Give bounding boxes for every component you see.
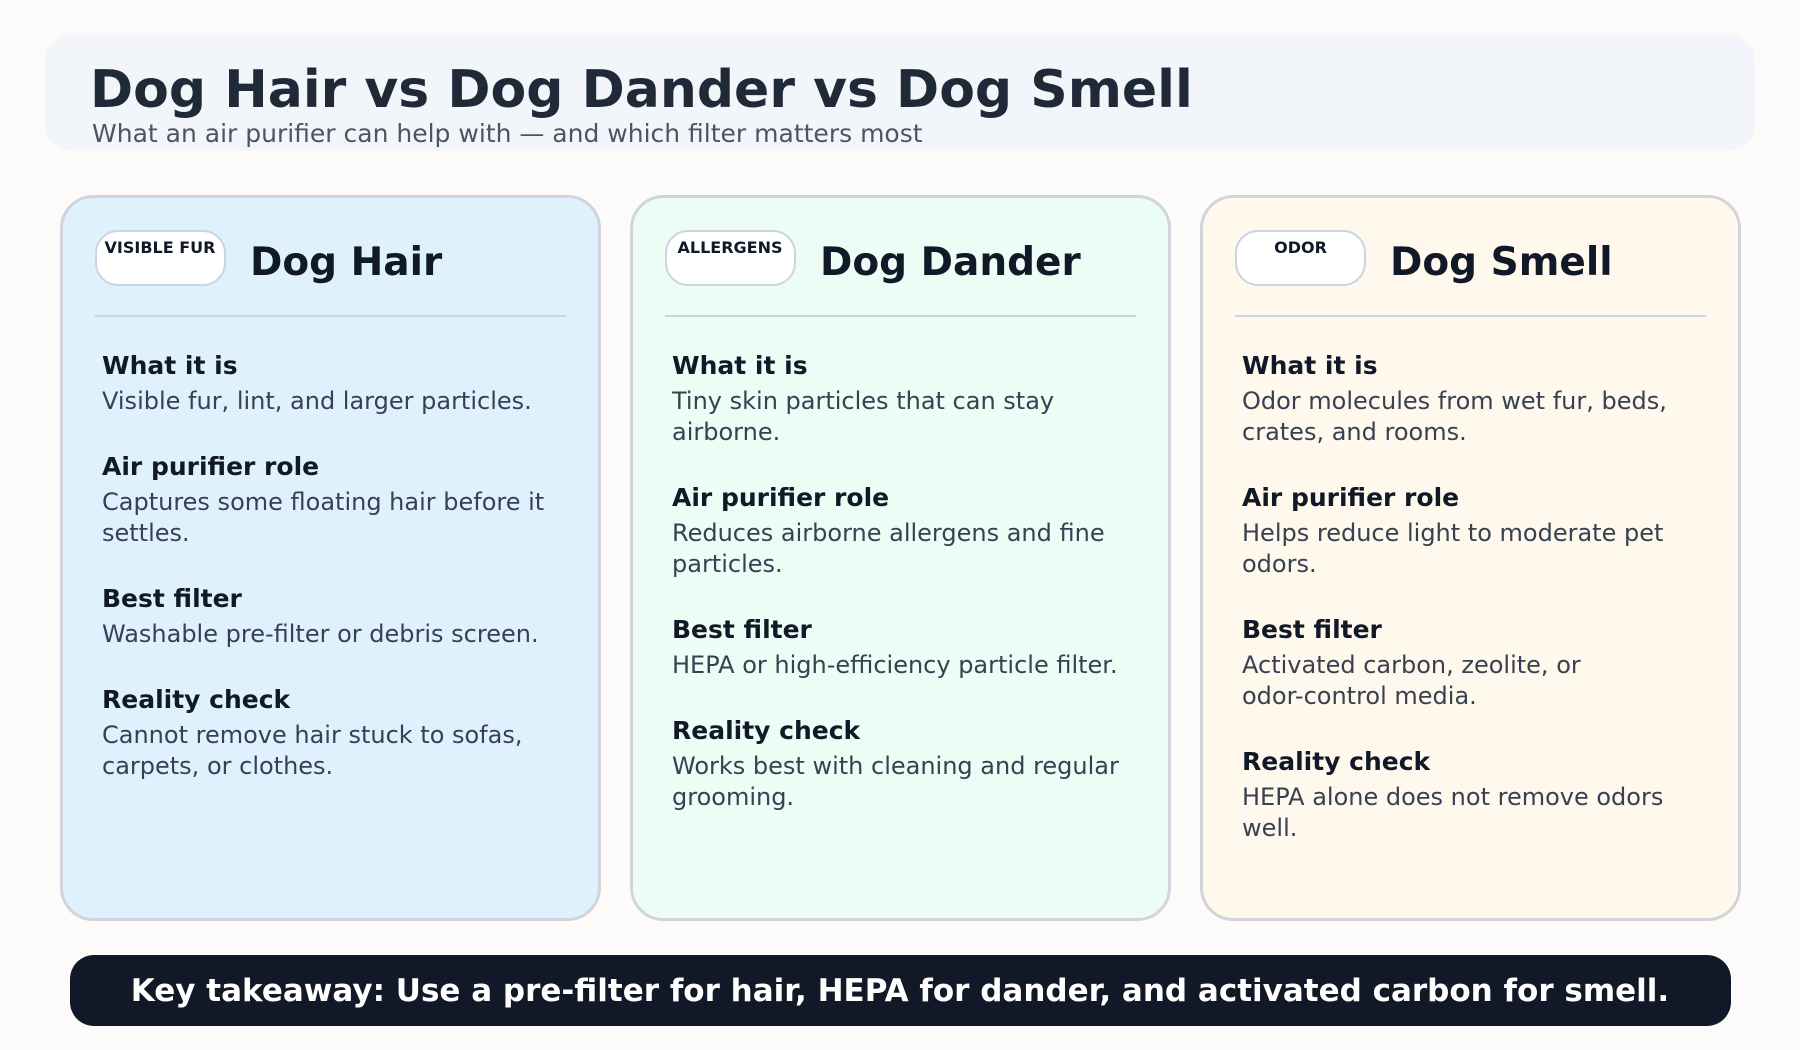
section: air purifier role: Air purifier role bbox=[672, 483, 889, 512]
section: reality check bbox=[672, 716, 1119, 811]
section: reality check: HEPA alone does not remove odors bbox=[1242, 783, 1663, 811]
section: what it is bbox=[671, 351, 1054, 446]
section: air purifier role bbox=[672, 483, 1105, 578]
header band bbox=[45, 35, 1755, 151]
heading: dog hair: Dog Hair bbox=[250, 240, 443, 285]
section: air purifier role: settles. bbox=[102, 519, 190, 547]
key takeaway banner bbox=[70, 955, 1731, 1026]
section: best filter: odor-control media. bbox=[1242, 682, 1477, 710]
section: air purifier role: Helps reduce light to moderate pet bbox=[1242, 519, 1663, 547]
section: reality check: well. bbox=[1242, 814, 1297, 842]
section: best filter: HEPA or high-efficiency particle filter. bbox=[672, 651, 1118, 679]
panel: dog dander bbox=[632, 196, 1170, 920]
section: what it is: What it is bbox=[672, 351, 808, 380]
badge: odor: ODOR bbox=[1274, 238, 1327, 257]
section: what it is: Tiny skin particles that can stay bbox=[671, 387, 1054, 415]
title: Dog Hair vs Dog Dander vs Dog Smell bbox=[90, 60, 1193, 120]
section: what it is bbox=[1242, 351, 1667, 446]
section: best filter: Best filter bbox=[102, 584, 243, 613]
section: best filter: Washable pre-filter or debris screen. bbox=[102, 620, 539, 648]
heading: dog dander: Dog Dander bbox=[820, 240, 1081, 285]
badge: visible fur bbox=[96, 231, 225, 285]
section: what it is: airborne. bbox=[672, 418, 780, 446]
section: best filter bbox=[1242, 615, 1581, 710]
panel: dog hair bbox=[62, 196, 600, 920]
section: what it is bbox=[102, 351, 532, 415]
panel: dog smell bbox=[1202, 196, 1740, 920]
section: reality check bbox=[102, 685, 523, 780]
section: air purifier role: Reduces airborne allergens and fine bbox=[672, 519, 1105, 547]
section: air purifier role: Air purifier role bbox=[1242, 483, 1459, 512]
section: reality check: grooming. bbox=[672, 783, 794, 811]
section: air purifier role: Air purifier role bbox=[102, 452, 319, 481]
section: reality check: Cannot remove hair stuck to sofas, bbox=[102, 721, 523, 749]
badge: visible fur: VISIBLE FUR bbox=[105, 238, 215, 257]
section: reality check: Reality check bbox=[672, 716, 862, 745]
section: best filter: Best filter bbox=[672, 615, 813, 644]
section: best filter: Best filter bbox=[1242, 615, 1383, 644]
badge: allergens: ALLERGENS bbox=[678, 238, 782, 257]
heading: dog smell: Dog Smell bbox=[1390, 240, 1613, 285]
section: air purifier role: odors. bbox=[1242, 550, 1317, 578]
section: air purifier role bbox=[102, 452, 544, 547]
section: best filter: Activated carbon, zeolite, or bbox=[1242, 651, 1581, 679]
badge: odor bbox=[1236, 231, 1365, 285]
section: reality check: Reality check bbox=[102, 685, 292, 714]
section: air purifier role: particles. bbox=[672, 550, 783, 578]
section: air purifier role bbox=[1242, 483, 1663, 578]
section: what it is: What it is bbox=[1242, 351, 1378, 380]
section: air purifier role: Captures some floating hair before it bbox=[102, 488, 544, 516]
section: best filter bbox=[102, 584, 539, 648]
section: reality check bbox=[1242, 747, 1663, 842]
section: what it is: crates, and rooms. bbox=[1242, 418, 1467, 446]
section: what it is: Visible fur, lint, and larger particles. bbox=[102, 387, 532, 415]
section: reality check: carpets, or clothes. bbox=[102, 752, 333, 780]
section: best filter bbox=[672, 615, 1118, 679]
badge: allergens bbox=[666, 231, 795, 285]
subtitle: What an air purifier can help with — and which filter matters most bbox=[92, 119, 923, 148]
section: reality check: Reality check bbox=[1242, 747, 1432, 776]
section: what it is: What it is bbox=[102, 351, 238, 380]
section: reality check: Works best with cleaning and regular bbox=[672, 752, 1119, 780]
key takeaway banner: Key takeaway: Use a pre-filter for hair, HEPA for dander, and activated carbon for smell. bbox=[131, 973, 1669, 1009]
section: what it is: Odor molecules from wet fur, beds, bbox=[1242, 387, 1667, 415]
